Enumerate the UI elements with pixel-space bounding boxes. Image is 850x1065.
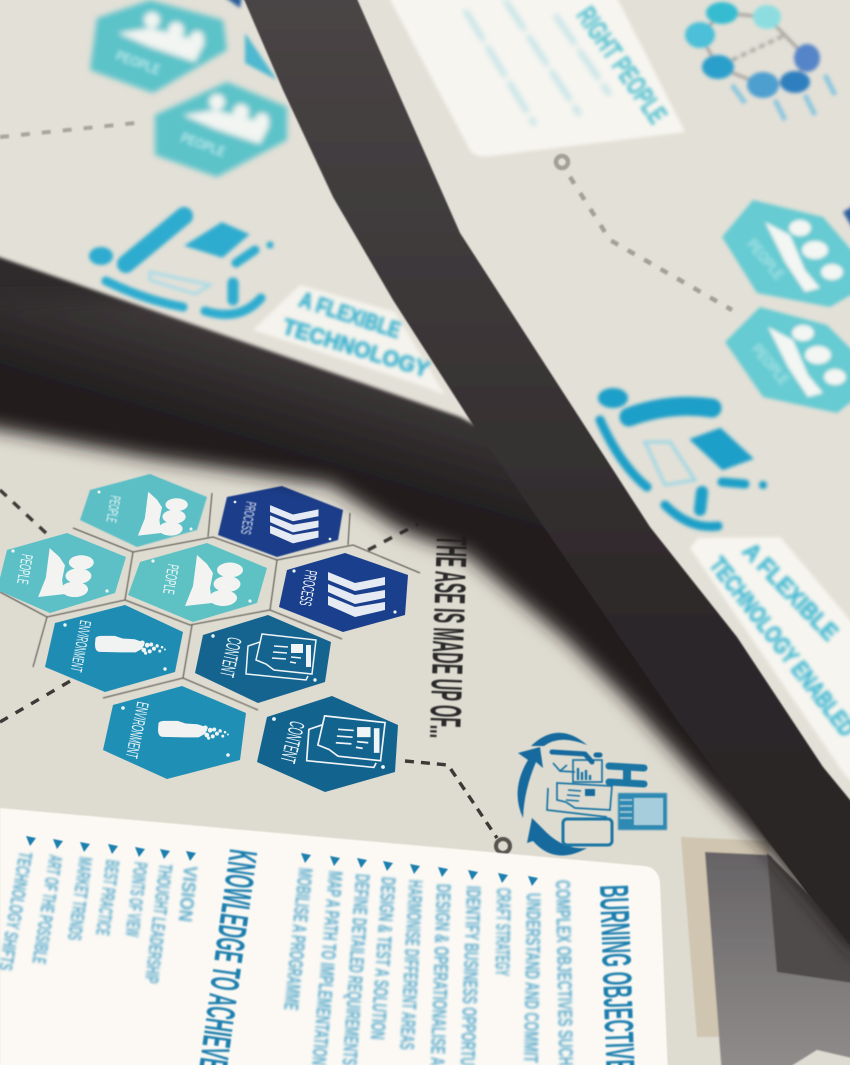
list: knowledge: MARKET TRENDS <box>63 856 95 942</box>
hexagon: environment lower: ENVIRONMENT <box>122 700 152 760</box>
list: knowledge: POINTS OF VIEW <box>120 861 150 938</box>
label: people right upper: PEOPLE <box>743 236 787 284</box>
hexagon: people top <box>80 474 207 547</box>
icon: network <box>685 2 835 120</box>
hexagon: process lower: PROCESS <box>296 569 320 607</box>
icon: team right <box>598 388 767 527</box>
box: flexible technology: TECHNOLOGY <box>280 314 433 382</box>
box: right people: RIGHT PEOPLE <box>571 1 673 129</box>
hexagon: people centre <box>128 543 267 622</box>
hexagon: environment upper: ENVIRONMENT <box>67 619 93 673</box>
panel: white lists <box>0 808 668 1065</box>
label: people blurred top: PEOPLE <box>113 47 163 79</box>
hexagon: right upper <box>722 200 850 307</box>
dashed connector lines <box>0 490 510 853</box>
dashed connector blurred <box>0 122 145 137</box>
hexagon: people left <box>0 533 126 613</box>
list: knowledge: ART OF THE POSSIBLE <box>27 853 65 965</box>
blurred hexagon sliver <box>245 33 277 80</box>
box: flexible technology right: A FLEXIBLE <box>737 538 843 646</box>
hexagon cell lines <box>0 493 420 710</box>
hexagon: blurred lower <box>155 82 287 177</box>
hexagon: people top: PEOPLE <box>102 494 124 524</box>
hexagon: process top: PROCESS <box>237 500 259 536</box>
hexagon: process lower <box>279 553 408 632</box>
shadow across lower poster <box>0 300 850 960</box>
hexagon: people left: PEOPLE <box>13 553 35 585</box>
list arrows: knowledge <box>26 836 196 861</box>
icon: blurred team <box>89 216 274 314</box>
hexagon: content upper: CONTENT <box>215 635 245 679</box>
hexagon: right lower <box>725 307 850 413</box>
dark frame: right poster <box>240 0 850 958</box>
list: knowledge: BEST PRACTICE <box>91 859 122 937</box>
label: people blurred lower: PEOPLE <box>178 129 228 161</box>
poster sheet: right <box>353 0 850 812</box>
icon: cycle of work <box>518 733 667 856</box>
hexagon: environment upper <box>45 605 183 692</box>
list: burning objectives: CRAFT STRATEGY <box>490 888 514 976</box>
right edge fragment <box>843 205 850 232</box>
hexagon: people centre: PEOPLE <box>159 563 181 595</box>
tan and grey panel <box>681 837 850 1065</box>
list arrows: burning objectives <box>301 853 538 886</box>
list: burning objectives <box>279 867 576 1065</box>
box: right people <box>385 0 685 156</box>
hexagon: blurred top <box>90 0 227 93</box>
list: knowledge: VISION <box>174 865 200 923</box>
hexagon: content lower <box>257 696 398 792</box>
list: knowledge <box>0 850 200 985</box>
label: people right lower: PEOPLE <box>748 341 792 389</box>
dashed connector: right <box>556 156 732 310</box>
poster sheet: top left <box>0 0 475 425</box>
hexagon: content upper <box>195 615 331 703</box>
hexagon: content lower: CONTENT <box>276 719 308 765</box>
hexagon: process top <box>218 486 343 557</box>
blue fragment at top <box>222 0 242 8</box>
lower poster sheet <box>0 400 850 1065</box>
hexagon: environment lower <box>103 686 246 779</box>
box: flexible technology: A FLEXIBLE <box>296 287 404 343</box>
box: flexible technology <box>253 285 445 395</box>
